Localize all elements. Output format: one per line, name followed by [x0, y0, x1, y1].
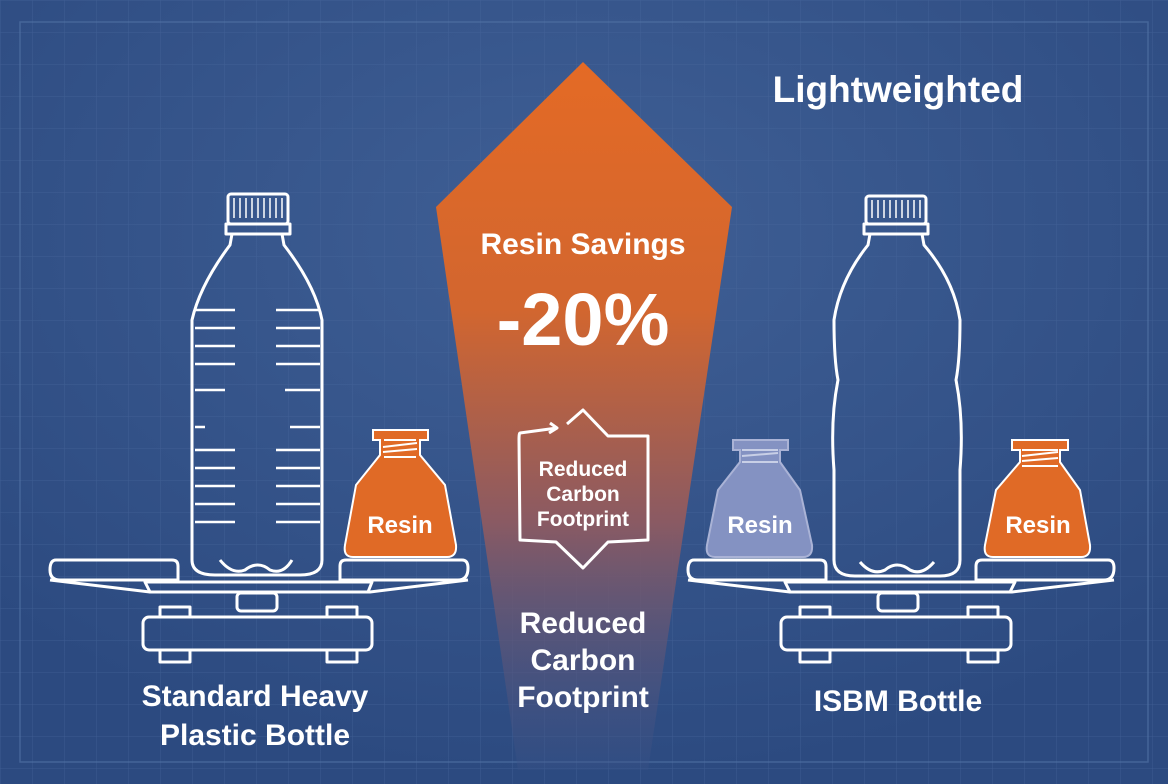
icon: resin weight light: [707, 440, 812, 557]
label: Reduced Carbon Footprint: Reduced: [520, 607, 646, 640]
icon: resin weight right: Resin: [1005, 512, 1071, 539]
icon: carbon badge: [519, 410, 648, 568]
icon: resin weight left: [345, 430, 456, 557]
label: Reduced Carbon Footprint: Footprint: [517, 681, 649, 714]
label: Reduced Carbon Footprint: Carbon: [530, 644, 636, 677]
icon: resin weight light: Resin: [727, 512, 793, 539]
icon: carbon badge: Carbon: [546, 483, 620, 506]
icon: resin weight left: Resin: [367, 512, 433, 539]
bottle: [228, 194, 288, 224]
label: ISBM Bottle: ISBM Bottle: [814, 685, 982, 718]
icon: carbon badge: Reduced: [539, 458, 627, 481]
title: Lightweighted: Lightweighted: [773, 69, 1023, 110]
left scale with heavy bottle: [50, 194, 468, 662]
scale: [50, 560, 178, 580]
icon: resin weight right: [985, 440, 1090, 557]
label: Standard Heavy Plastic Bottle: Standard Heavy: [142, 680, 369, 713]
label: Standard Heavy Plastic Bottle: [142, 680, 369, 752]
icon: carbon badge: Footprint: [537, 508, 629, 531]
stat: -20%: -20%: [497, 278, 669, 361]
label: Standard Heavy Plastic Bottle: Plastic Bottle: [160, 719, 350, 752]
label: Reduced Carbon Footprint: [517, 607, 649, 714]
heading: Resin Savings: Resin Savings: [480, 228, 686, 261]
orange savings arrow: [436, 62, 732, 770]
right scale with ISBM bottle: [688, 196, 1114, 662]
